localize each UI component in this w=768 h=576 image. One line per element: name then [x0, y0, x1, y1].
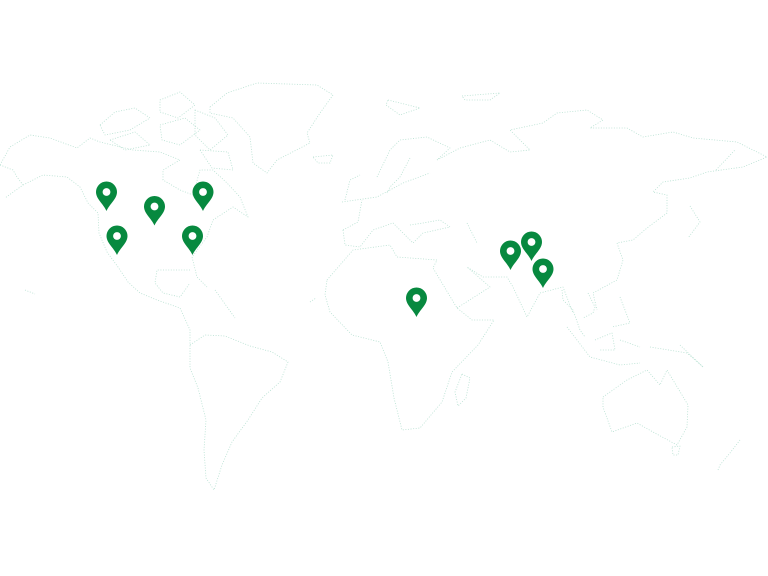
pin: north-west America [96, 182, 117, 211]
pin: central Africa [406, 288, 427, 317]
world map outline [0, 83, 767, 490]
pin: western United States [106, 226, 128, 255]
pin: central Canada [144, 196, 165, 226]
pin: northern India [521, 232, 542, 261]
pin: eastern India [532, 258, 554, 288]
pin: eastern United States [182, 226, 203, 255]
pin: eastern Canada [192, 182, 214, 211]
pin: Pakistan [500, 240, 521, 270]
